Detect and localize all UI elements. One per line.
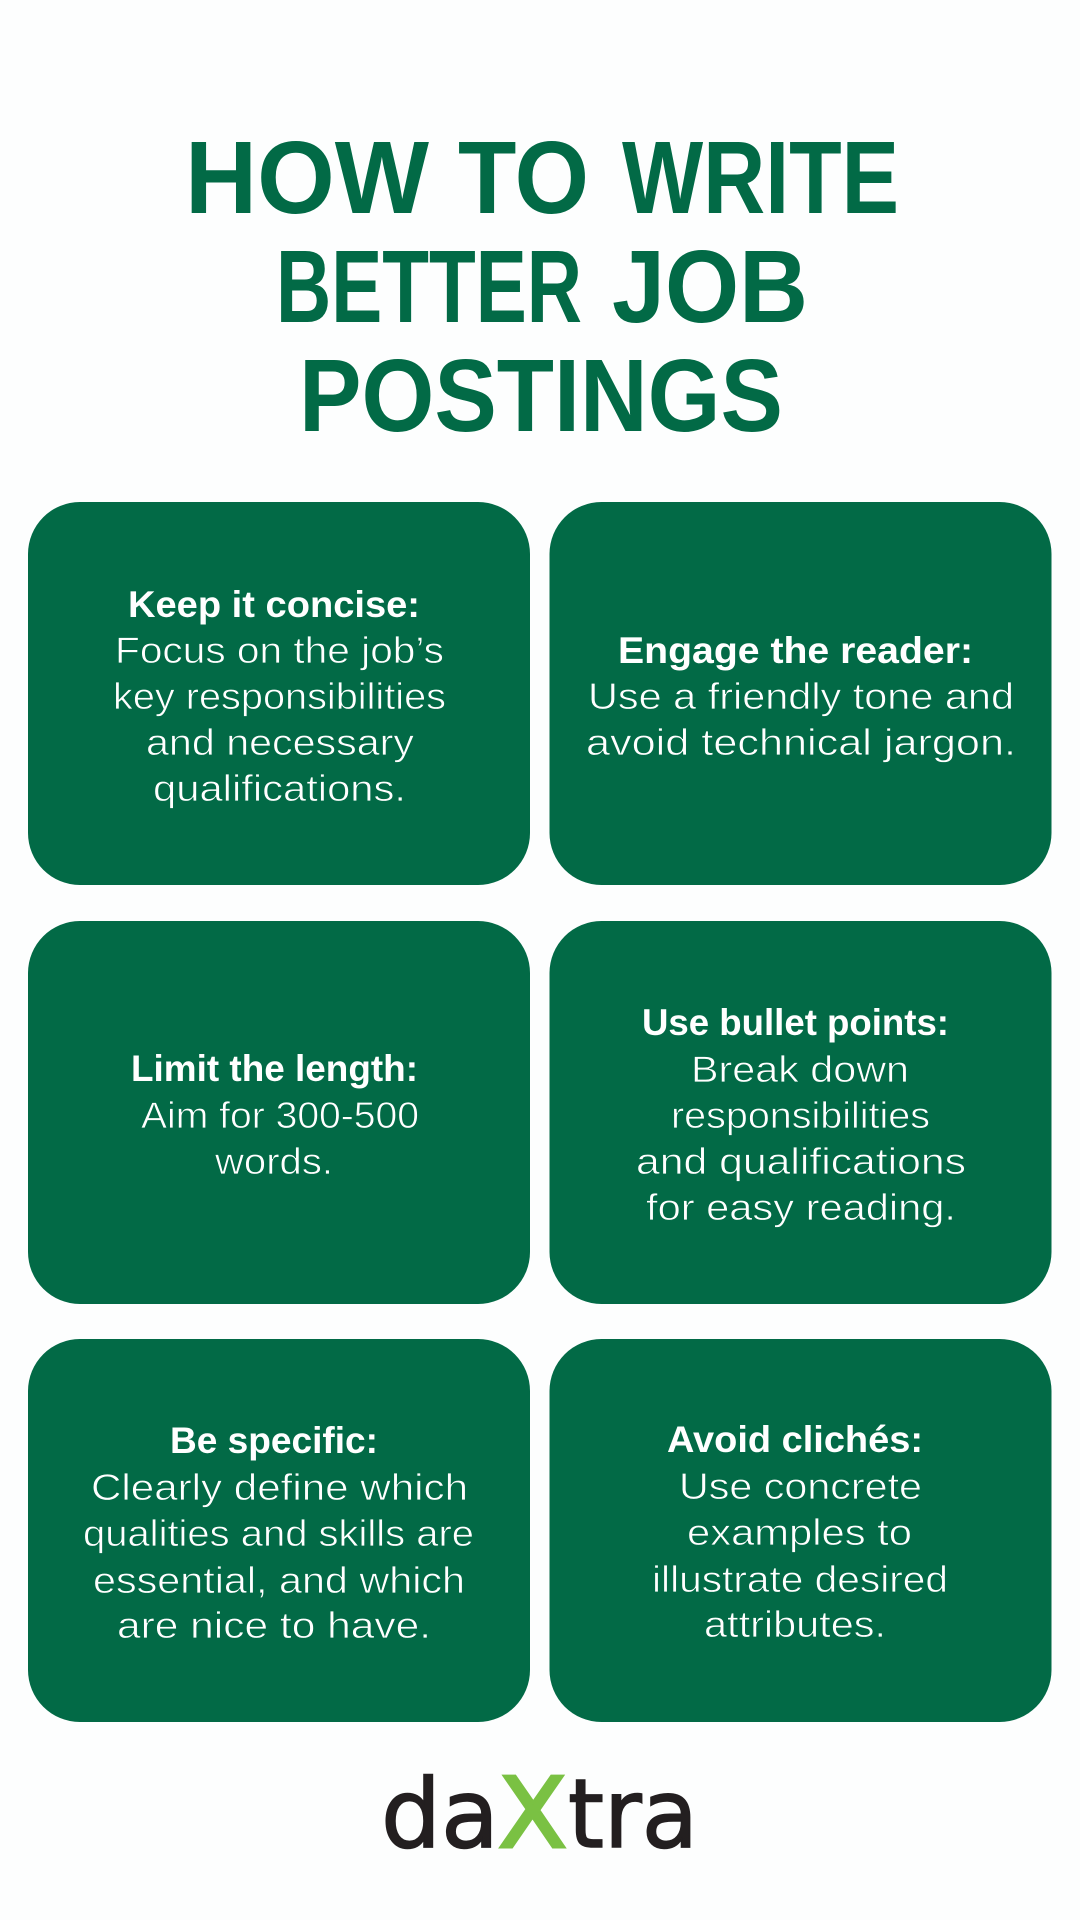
panel: keep it concise: and necessary: [146, 722, 415, 763]
title: JOB: [612, 229, 808, 344]
panel: engage the reader: avoid technical jargon.: [586, 722, 1016, 763]
panel: use bullet points: [550, 921, 1052, 1304]
panel: be specific: are nice to have.: [117, 1605, 431, 1646]
panel: be specific: Be specific:: [170, 1420, 378, 1461]
logo: daXtra: X: [498, 1757, 567, 1870]
panel: use bullet points: Use bullet points:: [642, 1002, 949, 1043]
logo: daXtra: [381, 1757, 698, 1870]
panel: avoid cliches: examples to: [687, 1512, 912, 1553]
panel: be specific: [28, 1339, 530, 1722]
panel: use bullet points: for easy reading.: [646, 1187, 956, 1228]
panel: keep it concise: key responsibilities: [113, 676, 446, 717]
title: POSTINGS: [299, 338, 783, 453]
panel: engage the reader: [550, 502, 1052, 885]
title: WRITE: [622, 120, 899, 235]
panel: keep it concise: Focus on the job’s: [115, 630, 444, 671]
title: BETTER: [276, 229, 582, 344]
panel: use bullet points: and qualifications: [636, 1141, 966, 1182]
panel: keep it concise: Keep it concise:: [128, 584, 420, 625]
panel: keep it concise: [28, 502, 530, 885]
title: [185, 120, 899, 453]
panel: limit the length: words.: [214, 1141, 333, 1182]
title: HOW: [185, 120, 430, 235]
panel: engage the reader: Use a friendly tone and: [588, 676, 1014, 717]
logo: daXtra: tra: [568, 1760, 698, 1870]
panel: use bullet points: Break down: [691, 1049, 909, 1090]
panel: limit the length: Aim for 300-500: [141, 1095, 419, 1136]
panel: keep it concise: qualifications.: [153, 768, 406, 809]
panel: avoid cliches: attributes.: [704, 1604, 886, 1645]
panel: be specific: qualities and skills are: [83, 1513, 474, 1554]
panel: be specific: essential, and which: [93, 1560, 465, 1601]
panel: avoid cliches: illustrate desired: [652, 1559, 948, 1600]
title: TO: [458, 120, 589, 235]
panel: be specific: Clearly define which: [91, 1467, 468, 1508]
panel: limit the length: [28, 921, 530, 1304]
panel: use bullet points: responsibilities: [671, 1095, 930, 1136]
panel: avoid cliches: Avoid clichés:: [667, 1419, 923, 1460]
panel: engage the reader: Engage the reader:: [618, 630, 973, 671]
logo: daXtra: da: [381, 1760, 499, 1870]
panel: limit the length: Limit the length:: [131, 1048, 418, 1089]
panel: avoid cliches: [550, 1339, 1052, 1722]
panel: avoid cliches: Use concrete: [679, 1466, 922, 1507]
